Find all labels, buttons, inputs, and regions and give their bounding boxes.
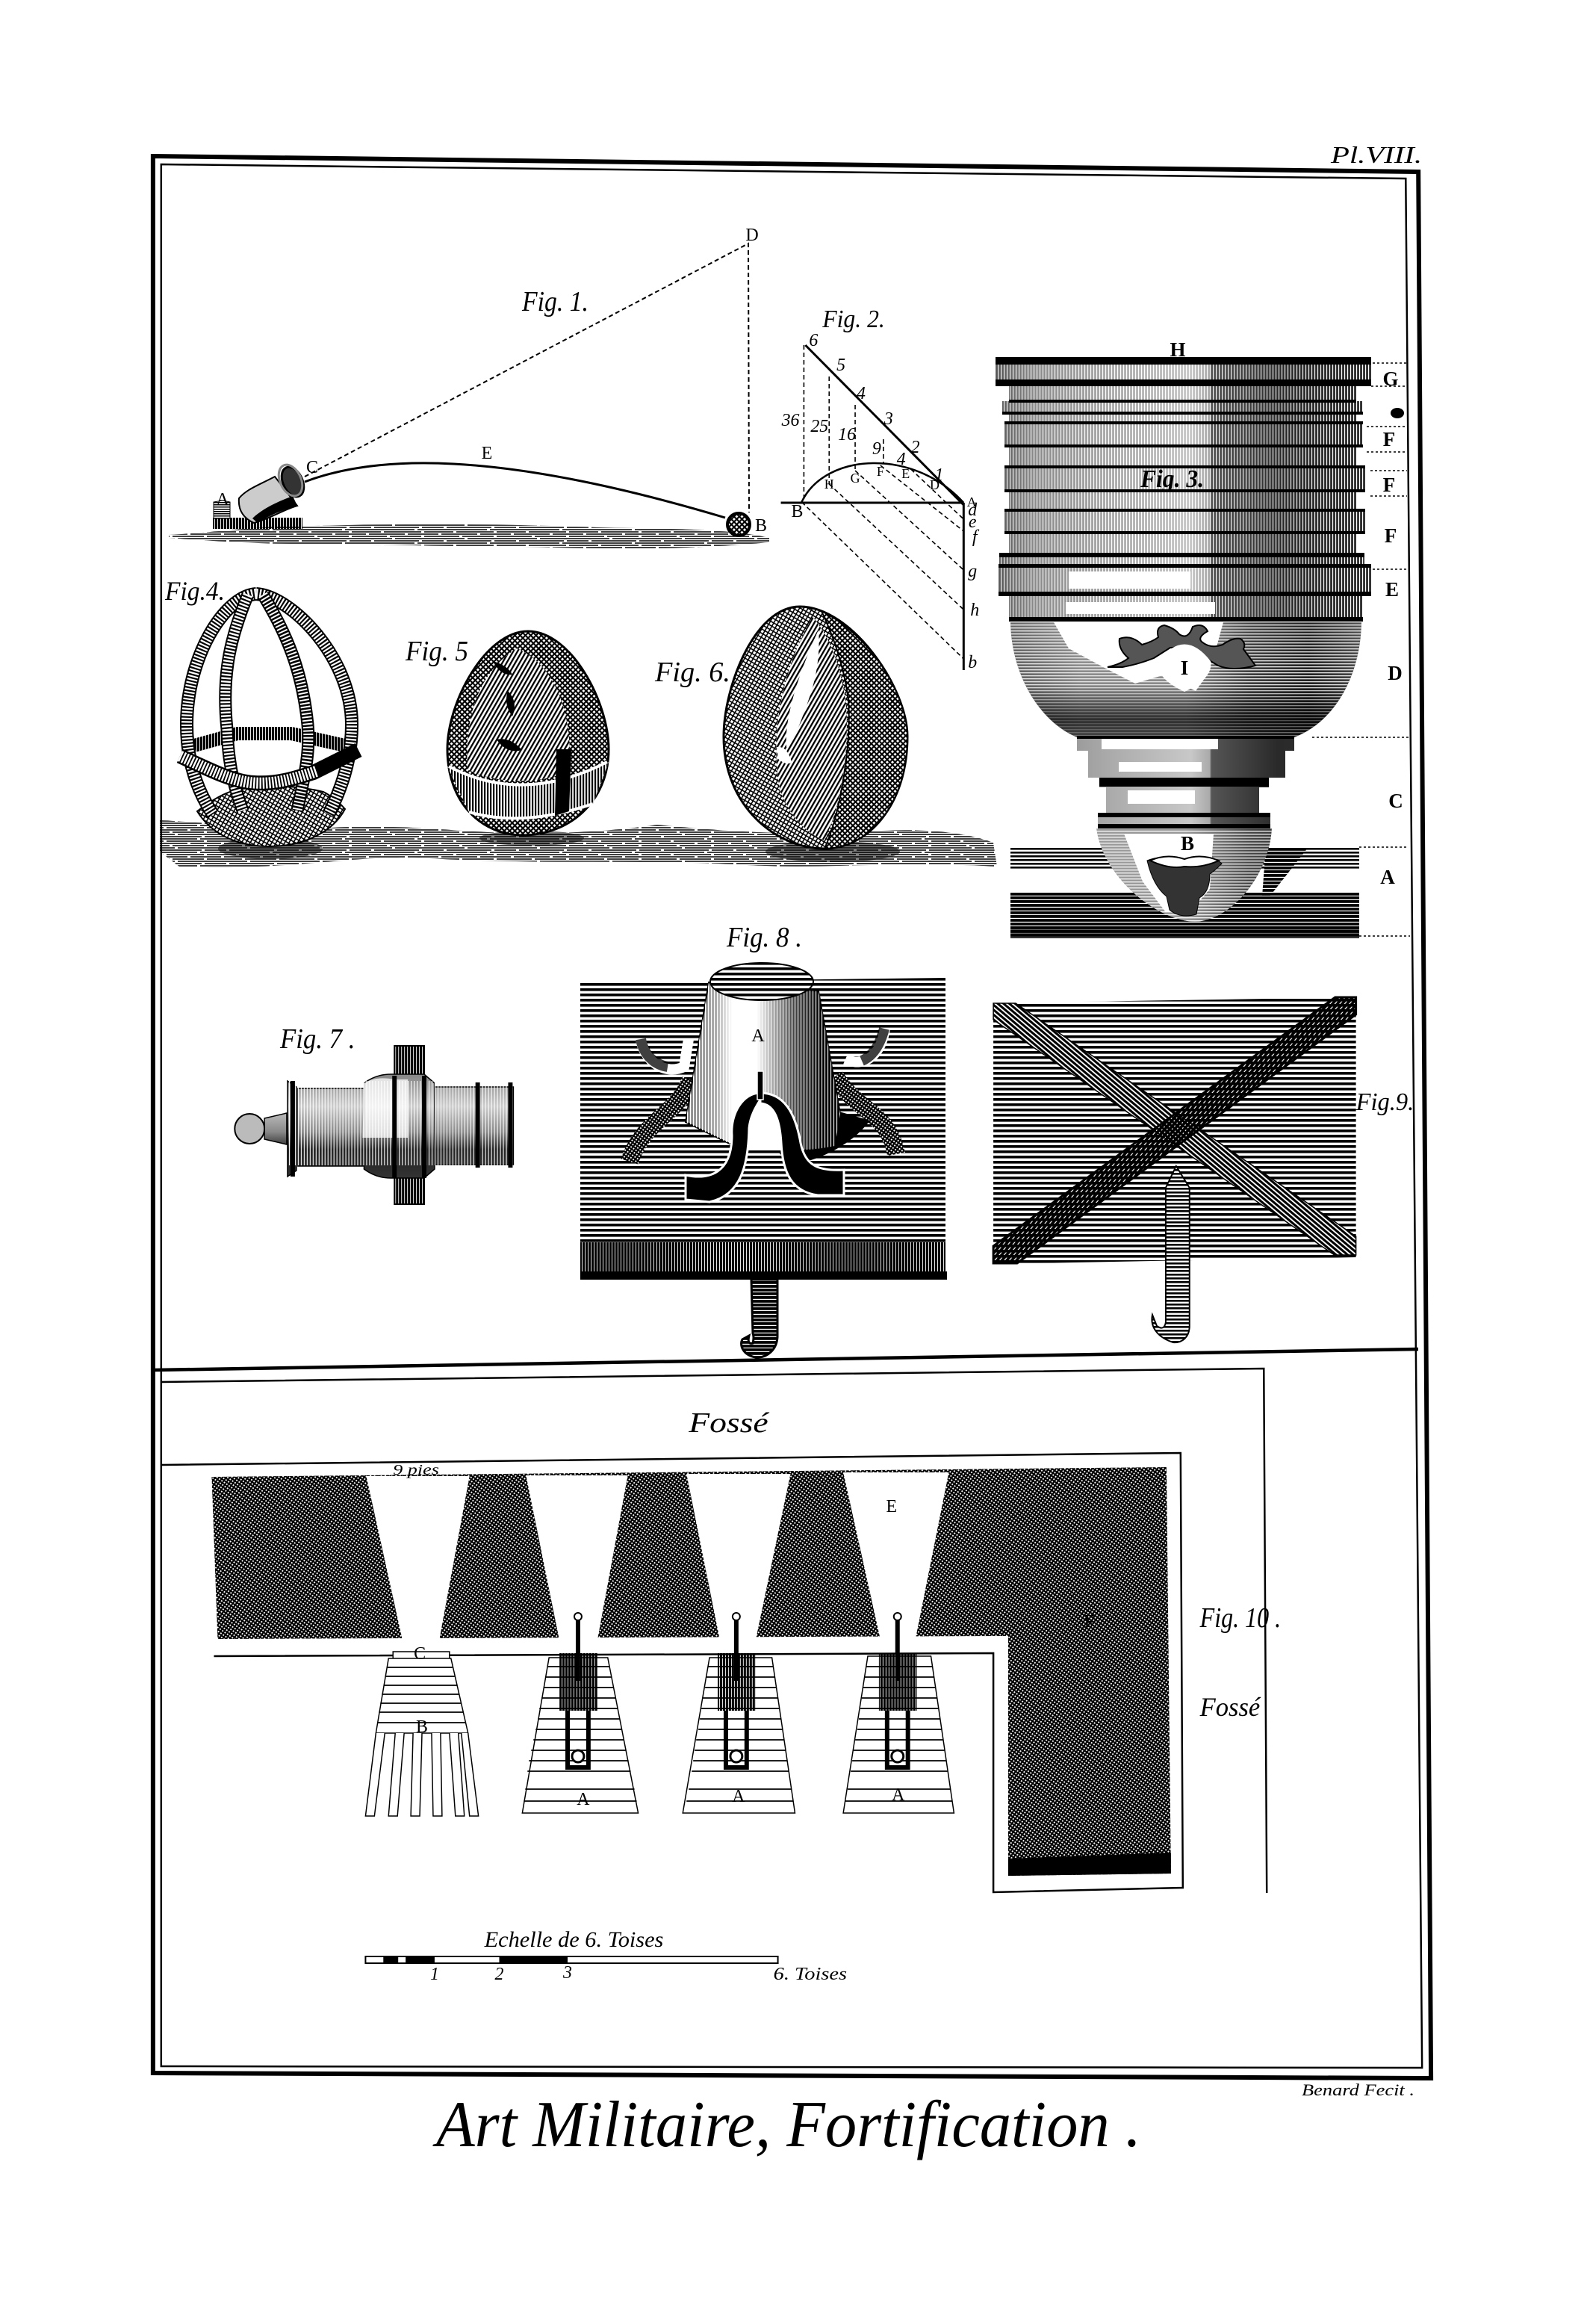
ornament: dolphins — [1108, 625, 1255, 669]
basket bottom — [197, 787, 345, 846]
white hoop edges — [449, 762, 607, 818]
figure 9 label: Fig.9. — [1355, 1088, 1414, 1116]
figure 3 labels: H — [1170, 338, 1186, 361]
figure 10: battery plan — [161, 1369, 1281, 1893]
parapet dark foot — [1008, 1853, 1171, 1876]
ink spot — [1391, 408, 1404, 418]
figure 2 labels: 4 — [857, 384, 866, 403]
right scale ticks — [1312, 363, 1410, 936]
figure 2 labels: 3 — [883, 409, 893, 429]
figure 10 labels: A — [577, 1790, 590, 1809]
bowl hatching — [1010, 620, 1361, 922]
shadows under the eggs — [218, 838, 323, 859]
centre post — [757, 1071, 763, 1100]
cross bar dark — [993, 997, 1356, 1263]
title: Art Militaire, Fortification . — [432, 2089, 1141, 2161]
figure 8 labels — [726, 922, 802, 1046]
figure 2 labels: 16 — [838, 425, 856, 444]
figure 3 labels: F — [1383, 428, 1395, 450]
hook — [742, 1280, 777, 1357]
figure 3 labels: G — [1382, 368, 1399, 390]
engraver credit: Benard Fecit . — [1302, 2080, 1414, 2099]
figure 10 labels: A — [892, 1785, 905, 1805]
board front — [580, 1242, 945, 1280]
cup bands — [996, 359, 1371, 622]
figure 2 labels: A — [967, 495, 977, 509]
figure 2 labels: 25 — [810, 417, 828, 436]
figure 3: mortar section — [996, 338, 1410, 938]
muzzle rings — [293, 1076, 510, 1178]
figure 2 labels: e — [969, 512, 977, 532]
figure 10 labels: Fossé — [688, 1407, 770, 1439]
scale bar filled segments — [383, 1957, 568, 1963]
figure 1 labels: C — [306, 458, 318, 477]
figure 2 labels: g — [968, 562, 977, 581]
figure 10 labels: Fig. 10 . — [1199, 1602, 1281, 1634]
figure 3 labels: F — [1385, 524, 1397, 547]
trunnion — [394, 1046, 424, 1204]
board — [993, 997, 1356, 1264]
figure 8 labels: Fig. 8 . — [726, 922, 802, 953]
barrel highlight — [362, 1078, 408, 1138]
sight lines — [305, 244, 749, 512]
scale numbers: 2 — [495, 1965, 503, 1984]
cone — [686, 982, 840, 1150]
figure 10 labels: A — [732, 1787, 745, 1806]
ground hatching — [160, 820, 997, 867]
ornament: shield — [1158, 644, 1211, 692]
embrasures — [366, 1472, 948, 1641]
figure 2 labels: B — [791, 502, 803, 521]
hatched interior — [467, 648, 570, 781]
figure 3 labels: E — [1385, 578, 1399, 601]
arch opening — [747, 1103, 781, 1150]
figure 2 labels: Fig. 2. — [822, 306, 885, 333]
divider between upper and lower section — [153, 1349, 1418, 1370]
mortar carriage — [213, 518, 302, 529]
ornament: mask — [1147, 858, 1222, 916]
bomb — [727, 513, 750, 536]
dark mouldings — [996, 357, 1371, 828]
upper side straps — [641, 1029, 885, 1070]
figure 4 label: Fig.4. — [164, 576, 225, 606]
scale bar body — [365, 1956, 778, 1963]
scale numbers: 3 — [562, 1963, 572, 1983]
gun platform 1 — [522, 1613, 639, 1813]
egg body — [447, 631, 609, 835]
cross bar light — [993, 1003, 1356, 1255]
figure 2 labels: b — [968, 653, 977, 672]
figure 7 label: Fig. 7 . — [279, 1023, 355, 1055]
front right foot — [760, 1093, 844, 1195]
highlight — [777, 630, 819, 763]
figure 1 labels: A — [216, 490, 229, 509]
figure 2 labels: 36 — [781, 411, 799, 430]
scale title: Echelle de 6. Toises — [484, 1927, 663, 1952]
barrel hatching — [288, 1081, 513, 1165]
figure 1 labels: E — [482, 444, 492, 463]
cup chamber bowl — [1010, 620, 1361, 737]
front left foot — [686, 1093, 763, 1202]
trajectory curve — [305, 463, 725, 518]
figure 2 labels: G — [851, 471, 860, 486]
figure 6 label: Fig. 6. — [654, 657, 730, 688]
cone top — [710, 963, 813, 1000]
mortar barrel — [239, 477, 297, 523]
figure 4: empty cage — [164, 576, 358, 846]
figure 10 labels — [393, 1407, 1281, 1809]
figure 3 labels: A — [1380, 866, 1395, 888]
ditch outlines — [161, 1369, 1267, 1893]
cone shadow — [777, 1106, 870, 1165]
figure 2 labels: 1 — [935, 465, 943, 485]
dark shells — [493, 661, 522, 751]
cup neck — [1077, 737, 1294, 828]
plate number: Pl.VIII. — [1330, 141, 1422, 168]
scale numbers — [430, 1963, 847, 1984]
parapet mass — [211, 1467, 1171, 1876]
figure 3 labels — [1140, 338, 1403, 888]
ground under figures 4 to 6 — [160, 820, 997, 867]
figure 2 labels: 2 — [911, 438, 920, 457]
figure 3 labels: F — [1383, 474, 1395, 496]
figure 3 labels: I — [1181, 657, 1188, 679]
scale numbers: 6. Toises — [774, 1965, 847, 1984]
figure 2 labels: F — [877, 464, 884, 479]
figure 6: closed egg shell — [654, 607, 907, 849]
figure 9: cross board — [993, 997, 1414, 1342]
figure 2 labels: 6 — [809, 331, 818, 350]
figure 8 labels: A — [751, 1026, 765, 1046]
plate frame — [153, 156, 1431, 2078]
figure 10 labels: E — [886, 1497, 897, 1516]
figure 5 label: Fig. 5 — [405, 636, 468, 667]
diagonal hatching — [776, 617, 847, 840]
figure 7: small cannon — [235, 1023, 513, 1204]
back hoop — [194, 734, 345, 746]
front hoop — [180, 750, 358, 783]
figure 1 labels: Fig. 1. — [521, 286, 588, 317]
small tower mark — [214, 501, 230, 518]
lower side straps — [630, 1076, 896, 1162]
figure 2 labels: 9 — [872, 439, 881, 459]
board top — [580, 978, 945, 1242]
bowl lower shadow — [1010, 620, 1361, 737]
figure 2 labels: H — [824, 477, 834, 492]
inner ribs — [226, 595, 308, 811]
figure 3 labels: B — [1181, 832, 1194, 855]
hook — [1152, 1166, 1190, 1342]
figure 2 labels: D — [930, 477, 940, 492]
figure 2 labels: h — [970, 601, 979, 620]
figure 2 labels: f — [972, 527, 980, 547]
figure 2 labels: 4 — [897, 450, 906, 469]
figure 10 labels: F — [1084, 1612, 1094, 1632]
figure 2 labels: d — [968, 501, 978, 520]
figure 1 labels: D — [745, 226, 759, 245]
figure 5: cage with grenades — [405, 631, 609, 835]
figure 10 labels: B — [416, 1717, 428, 1737]
outer ribs — [187, 594, 352, 814]
dark strip — [555, 749, 571, 816]
scale bar — [365, 1927, 847, 1984]
main lines — [781, 345, 963, 670]
figure 8: mould on board — [580, 922, 947, 1357]
cup highlights — [1054, 571, 1223, 915]
egg body — [724, 607, 907, 849]
cascabel knob — [235, 1114, 264, 1144]
shaded side — [822, 611, 907, 849]
figure 10 labels: 9 pies — [393, 1462, 439, 1478]
ground — [169, 524, 769, 548]
figure 10 labels: Fossé — [1199, 1692, 1261, 1722]
figure 1: mortar trajectory — [169, 226, 769, 548]
figure 3 labels: Fig. 3. — [1140, 465, 1204, 493]
figure 2 labels: E — [901, 466, 910, 481]
lower hoop — [447, 762, 609, 817]
trunnion — [1010, 847, 1359, 938]
vertical engraving lines — [996, 359, 1371, 620]
barrel sections — [264, 1074, 513, 1178]
figure 10 labels: C — [414, 1644, 426, 1664]
gun platform B: under construction — [365, 1652, 479, 1816]
gun platform 2 — [683, 1613, 795, 1813]
mortar muzzle — [277, 463, 308, 501]
figure 1 labels — [216, 226, 767, 536]
figure 1 labels: B — [755, 516, 767, 536]
figure 2 labels — [781, 306, 980, 672]
gun platform 3 — [843, 1613, 954, 1813]
figure 2 labels: 5 — [836, 356, 845, 375]
dashed construction lines — [801, 345, 963, 659]
parabola arc — [801, 463, 963, 503]
scale numbers: 1 — [430, 1965, 439, 1984]
figure 2: geometric diagram — [781, 306, 980, 672]
figure 3 labels: D — [1388, 662, 1403, 684]
cup breech — [1096, 828, 1272, 922]
figure 3 labels: C — [1388, 790, 1403, 812]
